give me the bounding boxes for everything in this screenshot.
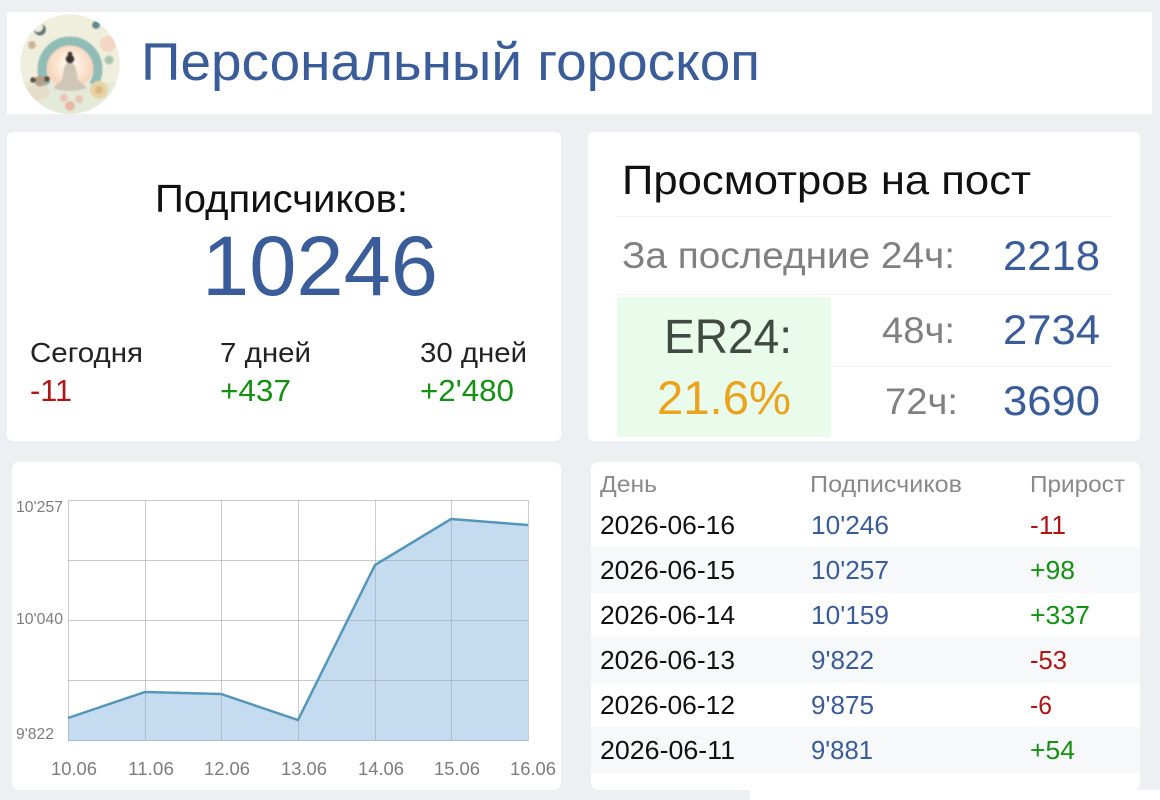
panel: subscribers	[7, 132, 561, 441]
stat: 30 days: 30 дней	[420, 337, 527, 368]
stat: 7 days: 7 дней	[220, 337, 311, 368]
title: Персональный гороскоп	[141, 33, 760, 92]
y axis labels: 10'257	[16, 499, 63, 516]
stat: 30 days	[420, 337, 527, 408]
y axis labels: 10'040	[16, 611, 63, 628]
table row: 2026-06-14: 2026-06-14	[600, 600, 735, 630]
views: 24h: За последние 24ч:	[622, 235, 955, 276]
x axis labels: 15.06	[434, 758, 480, 779]
y axis labels: 9'822	[16, 726, 54, 743]
stat: 30 days: +2'480	[420, 373, 514, 408]
views: 48h: 2734	[1003, 306, 1100, 353]
table row: 2026-06-13: 2026-06-13	[600, 645, 735, 675]
table row: 2026-06-12: 2026-06-12	[600, 690, 735, 720]
views: 24h: 2218	[1003, 232, 1100, 279]
ER24 box: 21.6%	[657, 371, 791, 424]
x axis labels: 16.06	[510, 758, 556, 779]
views: 24h	[622, 232, 1100, 279]
panel: daily table	[591, 462, 1140, 790]
y axis labels	[16, 499, 63, 743]
table row: 2026-06-11	[600, 735, 1075, 765]
table row: 2026-06-11: 2026-06-11	[600, 735, 735, 765]
table row: 2026-06-16: -11	[1030, 510, 1066, 540]
table row: 2026-06-16	[600, 510, 1066, 540]
strip at the bottom edge	[750, 790, 1160, 800]
table row: 2026-06-15: 10'257	[811, 555, 889, 585]
table row: 2026-06-13: -53	[1030, 645, 1067, 675]
table row: 2026-06-13	[600, 645, 1067, 675]
table row: 2026-06-16: 10'246	[811, 510, 889, 540]
table row: 2026-06-14: +337	[1030, 600, 1090, 630]
header panel	[7, 12, 1152, 116]
area chart	[68, 500, 528, 741]
x axis labels: 10.06	[51, 758, 97, 779]
views: 48h	[882, 306, 1100, 353]
table header: День	[600, 471, 657, 497]
panel: subscriber chart	[12, 462, 561, 790]
views: 48h: 48ч:	[882, 310, 955, 351]
table row: 2026-06-15: 2026-06-15	[600, 555, 735, 585]
stat: today: -11	[30, 373, 72, 408]
table row: 2026-06-12: -6	[1030, 690, 1052, 720]
table row: 2026-06-15	[600, 555, 1075, 585]
views: 72h: 3690	[1003, 377, 1100, 424]
icon: horoscope logo	[20, 14, 120, 116]
stat: today: Сегодня	[30, 337, 143, 368]
x axis labels: 13.06	[281, 758, 327, 779]
views heading: Просмотров на пост	[622, 157, 1031, 203]
table row: 2026-06-13: 9'822	[811, 645, 874, 675]
views: 72h: 72ч:	[885, 381, 958, 422]
x axis labels: 11.06	[128, 758, 174, 779]
panel: views per post	[588, 132, 1140, 441]
x axis labels: 12.06	[204, 758, 250, 779]
table row: 2026-06-11: +54	[1030, 735, 1075, 765]
views: 72h	[885, 377, 1100, 424]
table header	[600, 471, 1125, 497]
table row: 2026-06-16: 2026-06-16	[600, 510, 735, 540]
table row: 2026-06-11: 9'881	[811, 735, 873, 765]
stat: today	[30, 337, 143, 408]
table row: 2026-06-14	[600, 600, 1090, 630]
x axis labels	[51, 758, 556, 779]
table header: Подписчиков	[810, 471, 962, 497]
table row: 2026-06-12: 9'875	[811, 690, 874, 720]
subscribers total: 10246	[202, 219, 438, 313]
table row: 2026-06-12	[600, 690, 1052, 720]
stat: 7 days: +437	[220, 373, 291, 408]
table header: Прирост	[1030, 471, 1125, 497]
x axis labels: 14.06	[358, 758, 404, 779]
table row: 2026-06-15: +98	[1030, 555, 1075, 585]
ER24 box	[617, 297, 831, 437]
table row: 2026-06-14: 10'159	[811, 600, 889, 630]
subscribers heading: Подписчиков:	[155, 178, 408, 221]
stat: 7 days	[220, 337, 311, 408]
ER24 box: ER24:	[664, 311, 792, 364]
